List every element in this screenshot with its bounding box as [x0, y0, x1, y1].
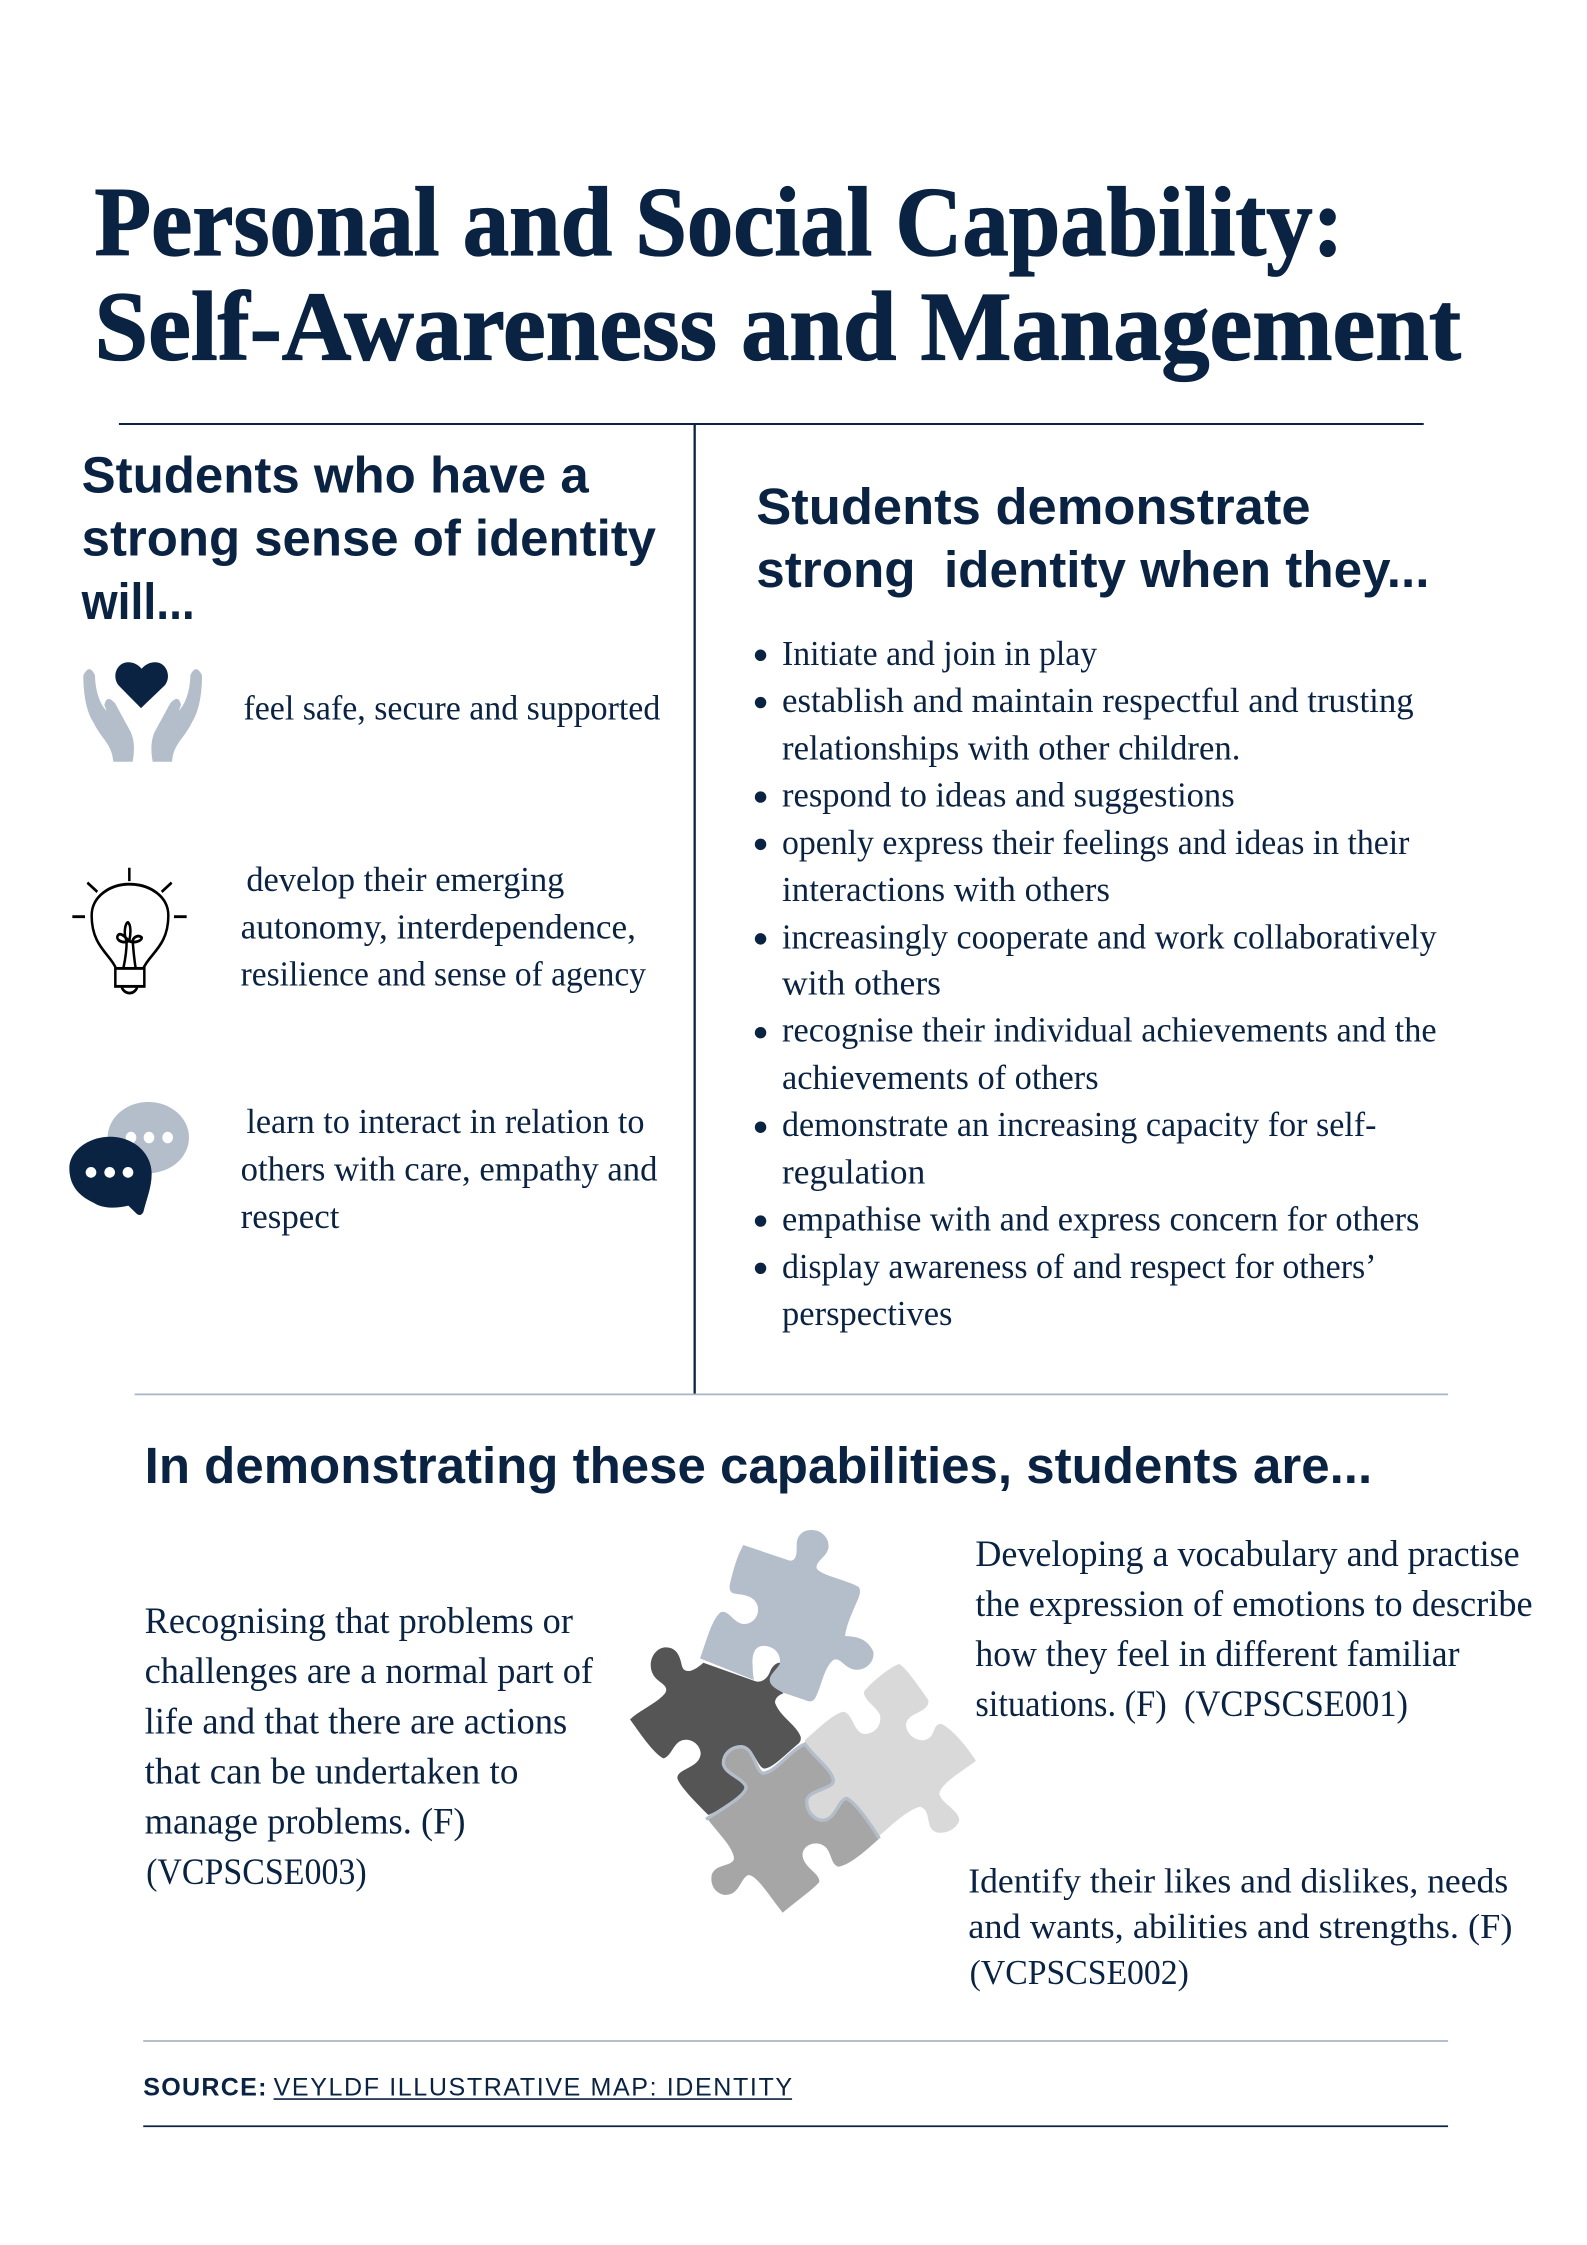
text: learn to interact	[241, 1102, 658, 1236]
text: developing a vocabulary: the expression of emotions to describe	[975, 1584, 1533, 1625]
heading: students demonstrate: strong identity when they...	[756, 541, 1429, 598]
text: developing a vocabulary: situations. (F) (VCPSCSE001)	[975, 1684, 1408, 1725]
title	[95, 169, 1461, 382]
panel: students demonstrate strong identity	[755, 478, 1437, 1333]
bullet list: regulation	[782, 1152, 926, 1191]
text: develop autonomy	[241, 860, 646, 994]
text: developing a vocabulary: how they feel in different familiar	[975, 1634, 1460, 1675]
text: recognising problems: challenges are a normal part of	[145, 1651, 594, 1692]
text: recognising problems: Recognising that problems or	[145, 1601, 573, 1642]
bullet list: interactions with others	[782, 870, 1110, 909]
bullet list: achievements of others	[782, 1058, 1099, 1097]
text: develop autonomy: autonomy, interdependence,	[241, 907, 636, 946]
bullet list: increasingly cooperate and work collaboratively	[782, 917, 1437, 956]
text: identify likes and dislikes: Identify their likes and dislikes, needs	[968, 1861, 1508, 1900]
bullet list: display awareness of and respect for others’	[782, 1247, 1376, 1286]
text: learn to interact: others with care, empathy and	[241, 1150, 658, 1189]
text: develop autonomy: resilience and sense of agency	[241, 955, 646, 994]
text: recognising problems: that can be undertaken to	[145, 1752, 518, 1793]
text: identify likes and dislikes	[968, 1861, 1513, 1992]
heading: students who have a strong sense of identity: will...	[81, 573, 195, 630]
icon: speech bubbles	[69, 1102, 189, 1215]
text: developing a vocabulary: Developing a vocabulary and practise	[975, 1534, 1520, 1575]
heading: students demonstrate: Students demonstrate	[756, 478, 1311, 535]
heading: students who have a strong sense of identity: strong sense of identity	[82, 510, 656, 567]
bullet list: Initiate and join in play	[782, 634, 1098, 673]
bullet list: respond to ideas and suggestions	[782, 776, 1235, 815]
text: recognising problems	[145, 1601, 594, 1893]
text: identify likes and dislikes: (VCPSCSE002)	[970, 1953, 1189, 1992]
text: recognising problems: (VCPSCSE003)	[146, 1852, 367, 1893]
heading: students who have a strong sense of identity: Students who have a	[82, 447, 589, 504]
bullet list: establish and maintain respectful and trusting	[782, 681, 1414, 720]
text: identify likes and dislikes: and wants, abilities and strengths. (F)	[968, 1907, 1513, 1946]
source: VEYLDF ILLUSTRATIVE MAP: IDENTITY	[274, 2073, 792, 2101]
icon: hands holding heart	[83, 662, 202, 762]
text: recognising problems: manage problems. (F)	[145, 1802, 466, 1843]
title: Personal and Social Capability:	[95, 169, 1344, 277]
icon: jigsaw puzzle	[630, 1530, 976, 1913]
heading: students demonstrate	[756, 478, 1429, 598]
bullet list: empathise with and express concern for others	[782, 1200, 1419, 1239]
source: SOURCE:	[143, 2073, 266, 2101]
text: recognising problems: life and that there are actions	[145, 1701, 567, 1742]
text: develop autonomy: develop their emerging	[246, 860, 564, 899]
text: learn to interact: respect	[241, 1197, 340, 1236]
bullet list: openly express their feelings and ideas in their	[782, 823, 1410, 862]
heading: students who have a strong sense of identity	[81, 447, 656, 630]
text: developing a vocabulary	[975, 1534, 1533, 1725]
text: learn to interact: learn to interact in relation to	[246, 1102, 645, 1141]
text: feel safe: feel safe, secure and supported	[243, 688, 661, 727]
title: Self-Awareness and Management	[95, 274, 1461, 382]
bullet list: recognise their individual achievements and the	[782, 1011, 1437, 1050]
heading: in demonstrating these capabilities: In demonstrating these capabilities, students are...	[145, 1437, 1372, 1494]
bullet list: demonstrate an increasing capacity for self-	[782, 1105, 1376, 1144]
bullet list	[755, 634, 1437, 1333]
bullet list: relationships with other children.	[782, 728, 1240, 767]
icon: light bulb	[72, 868, 187, 993]
panel: strong sense of identity	[69, 447, 661, 1236]
bullet list: with others	[782, 963, 941, 1002]
bullet list: perspectives	[782, 1294, 952, 1333]
